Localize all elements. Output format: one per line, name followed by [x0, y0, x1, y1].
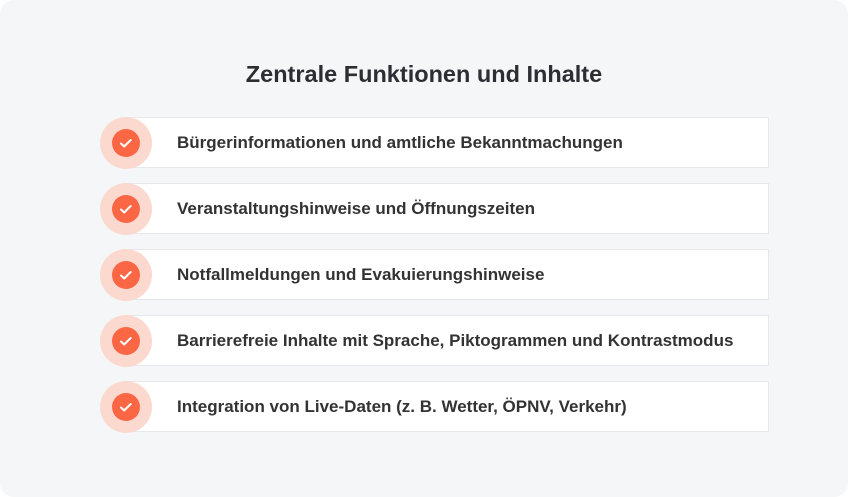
- item 2: Veranstaltungshinweise und Öffnungszeiten: [177, 199, 535, 218]
- title: Zentrale Funktionen und Inhalte: [246, 61, 602, 87]
- item 5: Integration von Live-Daten (z. B. Wetter, ÖPNV, Verkehr): [177, 397, 627, 416]
- item 1: [100, 117, 769, 169]
- item 5: [100, 381, 769, 433]
- icon: check: [100, 183, 152, 235]
- icon: check: [100, 381, 152, 433]
- item 4: [100, 315, 769, 367]
- item 3: Notfallmeldungen und Evakuierungshinweise: [177, 265, 544, 284]
- icon: check: [100, 117, 152, 169]
- item 4: Barrierefreie Inhalte mit Sprache, Piktogrammen und Kontrastmodus: [177, 331, 733, 350]
- item 2: [100, 183, 769, 235]
- icon: check: [100, 315, 152, 367]
- item 1: Bürgerinformationen und amtliche Bekanntmachungen: [177, 133, 623, 152]
- item 3: [100, 249, 769, 301]
- icon: check: [100, 249, 152, 301]
